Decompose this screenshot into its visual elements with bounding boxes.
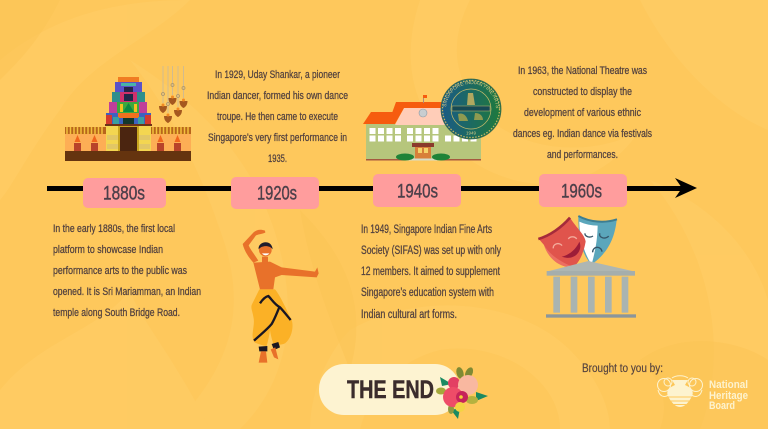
- text block: 1880s: performance arts to the public was: [53, 265, 187, 277]
- the end badge: THE END: [347, 376, 434, 404]
- text block: 1880s: temple along South Bridge Road.: [53, 307, 180, 319]
- credit text: Brought to you by:: [582, 363, 663, 375]
- text block: 1940s: In 1949, Singapore Indian Fine Arts: [361, 224, 492, 236]
- icon: SIFAS seal: 1949: [466, 130, 477, 136]
- logo: National Heritage Board: Board: [709, 400, 735, 412]
- the end badge: [319, 364, 460, 415]
- icon: hanging oil lamps: [159, 66, 188, 123]
- text block: 1940s: Singapore's education system with: [361, 287, 494, 299]
- logo: National Heritage Board: Heritage: [709, 390, 748, 402]
- timeline arrow: [47, 178, 697, 198]
- label: 1920s: 1920s: [257, 184, 297, 204]
- illustration: dancer: [243, 230, 319, 363]
- text block: 1880s: opened. It is Sri Mariamman, an Indian: [53, 286, 201, 298]
- logo: National Heritage Board: National: [709, 379, 748, 391]
- label: 1940s: [373, 174, 461, 207]
- text block: 1960s: In 1963, the National Theatre was: [518, 65, 647, 77]
- label: 1920s: [231, 177, 319, 209]
- text block: 1920s: In 1929, Uday Shankar, a pioneer: [215, 69, 340, 81]
- label: 1880s: [83, 178, 166, 208]
- text block: 1940s: Society (SIFAS) was set up with only: [361, 245, 501, 257]
- illustration: school building: [363, 95, 481, 160]
- text block: 1920s: 1935.: [268, 153, 287, 165]
- text block: 1960s: and performances.: [547, 149, 618, 161]
- icon: SIFAS seal: [440, 78, 502, 140]
- text block: 1940s: Indian cultural art forms.: [361, 309, 457, 321]
- logo: National Heritage Board: [658, 376, 748, 412]
- label: 1960s: 1960s: [561, 182, 602, 202]
- text block: 1920s: [207, 69, 348, 165]
- icon: flower bouquet: [436, 366, 488, 419]
- illustration: theatre masks on pavilion: [538, 216, 636, 318]
- text block: 1960s: dances eg. Indian dance via festivals: [513, 128, 652, 140]
- text block: 1940s: [361, 224, 501, 321]
- text block: 1880s: platform to showcase Indian: [53, 244, 163, 256]
- text block: 1920s: troupe. He then came to execute: [217, 111, 338, 123]
- label: 1940s: 1940s: [397, 182, 438, 202]
- text block: 1880s: In the early 1880s, the first local: [53, 223, 175, 235]
- illustration: temple gopuram: [65, 77, 191, 161]
- text block: 1960s: [513, 65, 652, 161]
- text block: 1940s: 12 members. It aimed to supplement: [361, 266, 501, 278]
- label: 1880s: 1880s: [103, 184, 145, 204]
- text block: 1920s: Indian dancer, formed his own dance: [207, 90, 348, 102]
- label: 1960s: [539, 174, 627, 207]
- text block: 1960s: constructed to display the: [533, 86, 632, 98]
- text block: 1920s: Singapore's very first performance in: [208, 132, 347, 144]
- text block: 1960s: development of various ethnic: [524, 107, 641, 119]
- text block: 1880s: [53, 223, 201, 319]
